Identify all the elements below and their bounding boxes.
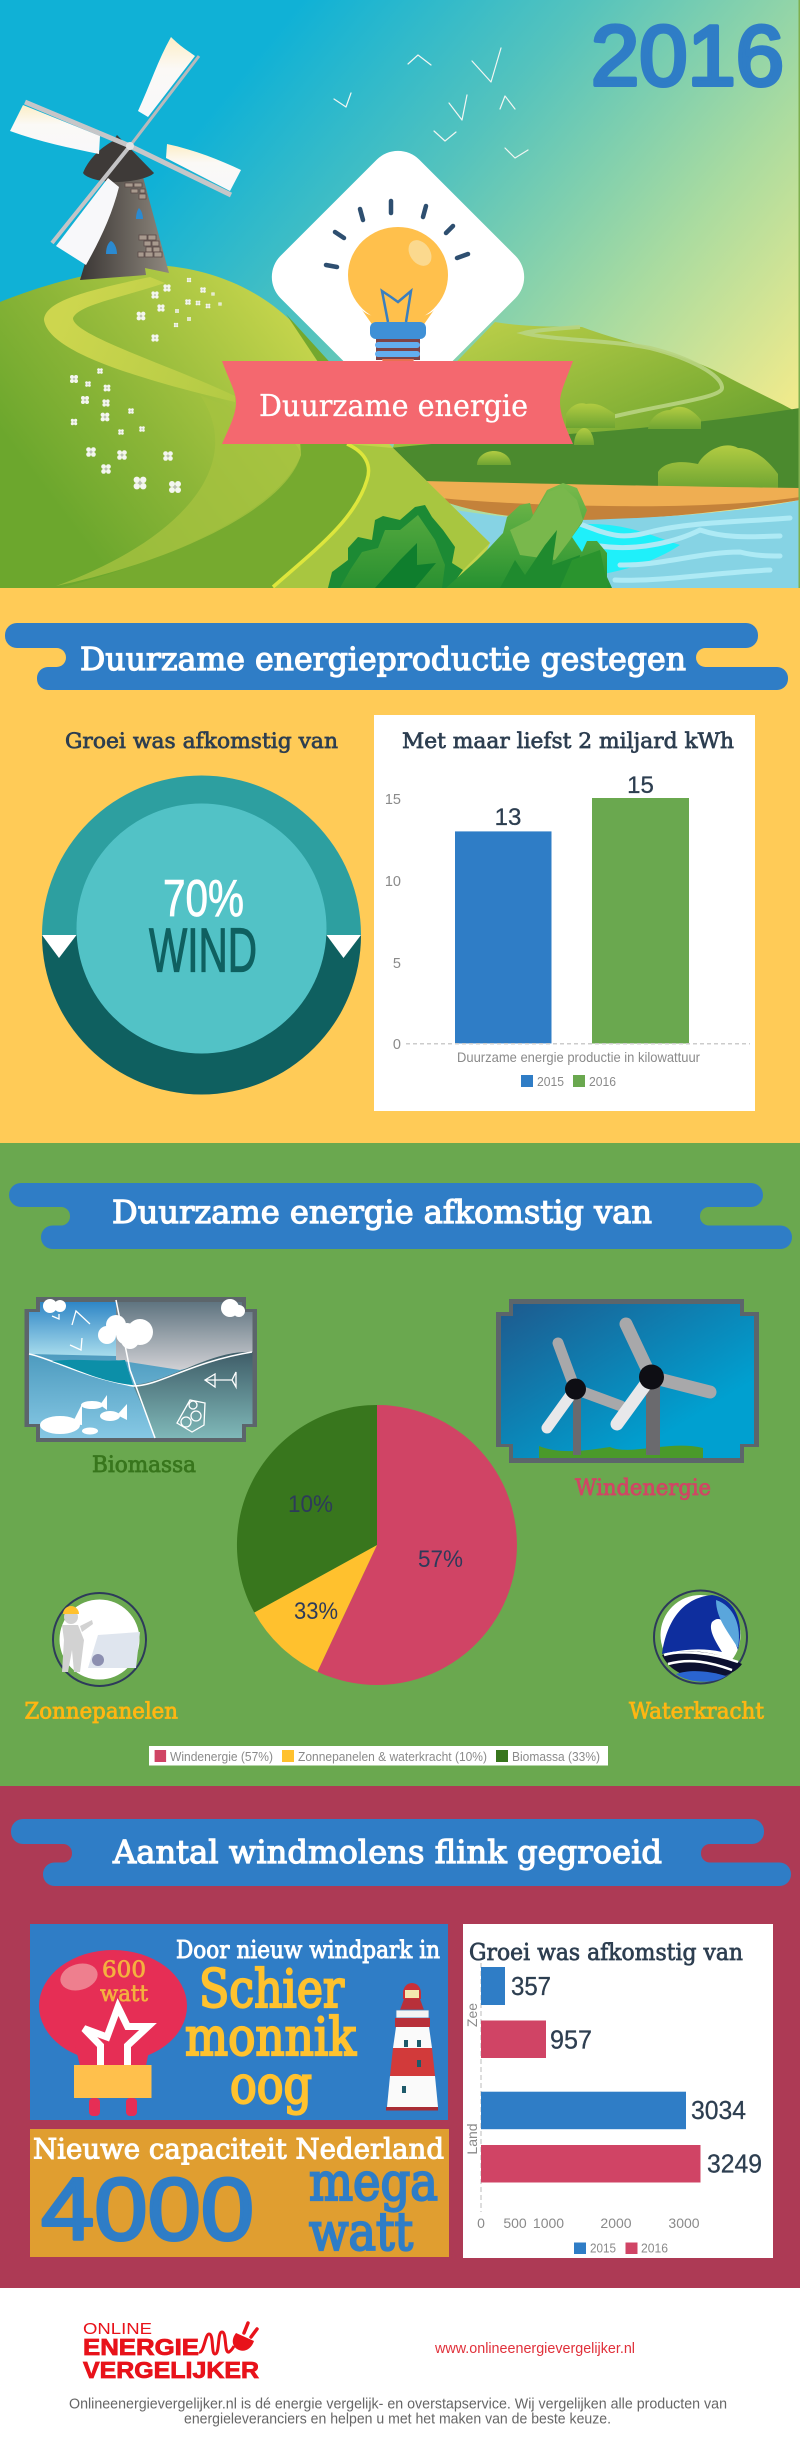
heading banner: Duurzame energie afkomstig van	[112, 1193, 652, 1231]
icon: solar panel worker	[53, 1593, 146, 1686]
intro text: Door nieuw windpark in	[176, 1936, 440, 1964]
section: energy production	[0, 588, 800, 1143]
sand bank	[423, 481, 800, 520]
logo: Online Energie Vergelijker: ENERGIE	[83, 2334, 199, 2360]
lighter swoosh	[56, 395, 301, 586]
place name	[185, 1960, 356, 2116]
icon: lighthouse	[386, 1983, 438, 2110]
pie chart: energy sources: 10%	[288, 1491, 333, 1518]
lower dark slope	[60, 440, 369, 588]
pie chart legend: Zonnepanelen & waterkracht (10%)	[298, 1749, 487, 1764]
horizontal bar chart: land vs sea: Groei was afkomstig van	[469, 1940, 743, 1966]
year 2016: 2016	[591, 9, 784, 104]
section background	[0, 1143, 800, 1786]
footer description: energieleveranciers en helpen u met het maken van de beste keuze.	[184, 2410, 611, 2428]
donut: 70% wind: 70%	[163, 870, 244, 928]
heading banner: Duurzame energieproductie gestegen	[80, 640, 686, 678]
section: hero landscape	[0, 0, 800, 588]
logo: Online Energie Vergelijker	[83, 2321, 259, 2383]
icon: red lightbulb 600 watt: 600	[102, 1958, 146, 1983]
pie chart legend: Biomassa (33%)	[512, 1749, 600, 1764]
lower bright path line	[273, 444, 369, 587]
logo: Online Energie Vergelijker: VERGELIJKER	[83, 2357, 259, 2383]
horizontal bar chart: land vs sea: 3034	[691, 2095, 746, 2125]
icon: red lightbulb 600 watt: watt	[100, 1982, 148, 2007]
horizontal bar chart: land vs sea: 2016	[641, 2240, 668, 2256]
horizontal bar chart: land vs sea	[463, 1924, 773, 2258]
light slope right of path	[273, 444, 490, 588]
icon: red lightbulb 600 watt	[39, 1950, 187, 2116]
website url: www.onlineenergievergelijker.nl	[434, 2340, 635, 2357]
title ribbon: Duurzame energie	[259, 389, 528, 424]
birds	[334, 48, 528, 158]
left hill	[0, 266, 490, 588]
panel: windpark Schiermonnikoog	[30, 1924, 448, 2120]
horizontal bar chart: land vs sea: 3000	[668, 2215, 700, 2231]
right edge strip	[798, 0, 800, 588]
place name: Schier	[199, 1960, 344, 2020]
logo: Online Energie Vergelijker: ONLINE	[83, 2321, 152, 2338]
pie chart: energy sources: 57%	[418, 1546, 463, 1573]
left subtitle: Groei was afkomstig van	[65, 729, 338, 754]
section: wind turbines	[0, 1786, 800, 2288]
title ribbon	[222, 361, 573, 444]
bar chart: production 2015 vs 2016: 5	[393, 956, 401, 972]
heading banner	[0, 623, 800, 690]
heading banner	[0, 1183, 800, 1249]
panel: new capacity: watt	[309, 2203, 413, 2263]
lightbulb badge	[259, 138, 537, 416]
tower	[80, 173, 169, 280]
right bush	[446, 483, 612, 588]
pie chart legend	[149, 1746, 608, 1766]
bulb base	[370, 322, 426, 339]
bar chart: production 2015 vs 2016: 2015	[537, 1074, 564, 1089]
donut: 70% wind	[42, 775, 361, 1094]
windows and bricks	[106, 241, 117, 254]
bar chart: production 2015 vs 2016: 2016	[589, 1074, 616, 1089]
bar chart: production 2015 vs 2016: 15	[385, 792, 401, 808]
poles	[25, 56, 231, 243]
bar chart: production 2015 vs 2016: Met maar liefst 2 miljard kWh	[402, 729, 734, 754]
illustration: wind turbines frame	[496, 1299, 759, 1463]
horizontal bar chart: land vs sea: Land	[464, 2123, 480, 2155]
horizontal bar chart: land vs sea: 500	[503, 2215, 527, 2231]
horizontal bar chart: land vs sea: 957	[550, 2024, 592, 2054]
heading banner	[0, 1819, 800, 1886]
horizontal bar chart: land vs sea: 3249	[707, 2148, 762, 2178]
section background	[0, 588, 800, 1143]
place name: oog	[230, 2056, 312, 2116]
pie chart: energy sources: 33%	[294, 1598, 338, 1625]
panel: new capacity: 4000	[41, 2160, 254, 2258]
bar chart: production 2015 vs 2016	[374, 715, 755, 1111]
pie chart: energy sources	[237, 1405, 517, 1685]
left bush	[328, 505, 463, 588]
section: energy sources	[0, 1143, 800, 1786]
bar chart: production 2015 vs 2016: 0	[393, 1037, 401, 1053]
sails	[138, 37, 195, 117]
horizontal bar chart: land vs sea: Zee	[464, 2003, 480, 2027]
roof	[83, 135, 154, 182]
footer description: Onlineenergievergelijker.nl is dé energie vergelijk- en overstapservice. Wij vergelijken alle producten van	[69, 2396, 727, 2412]
horizontal bar chart: land vs sea: 2000	[600, 2215, 632, 2231]
right hill and landscape	[380, 322, 800, 500]
bar chart: production 2015 vs 2016: 10	[385, 874, 401, 890]
ground	[539, 1446, 703, 1458]
section background	[0, 1786, 800, 2288]
sky background	[0, 0, 800, 588]
label: Biomassa: Biomassa	[92, 1453, 196, 1478]
panel: new capacity: mega	[309, 2153, 438, 2213]
section: footer	[0, 2288, 800, 2458]
place name: monnik	[185, 2008, 356, 2068]
label: Waterkracht: Waterkracht	[629, 1700, 764, 1724]
foreground flowers	[70, 278, 222, 493]
turbine small	[547, 1343, 621, 1455]
panel: new capacity	[30, 2129, 449, 2263]
pie chart legend: Windenergie (57%)	[170, 1749, 273, 1764]
bulb	[348, 227, 448, 323]
bar chart: production 2015 vs 2016: 15	[627, 772, 654, 799]
label: Zonnepanelen: Zonnepanelen	[24, 1700, 178, 1724]
bar chart: production 2015 vs 2016: Duurzame energie productie in kilowattuur	[457, 1049, 700, 1065]
footer background	[0, 2288, 800, 2458]
horizontal bar chart: land vs sea: 357	[511, 1971, 551, 2001]
bar chart: production 2015 vs 2016: 13	[495, 804, 521, 831]
heading banner: Aantal windmolens flink gegroeid	[112, 1833, 662, 1871]
water	[450, 500, 800, 588]
small bushes	[477, 403, 778, 489]
label: Windenergie: Windenergie	[575, 1476, 711, 1501]
panel: new capacity: Nieuwe capaciteit Nederland	[33, 2132, 444, 2166]
icon: water wave	[654, 1590, 747, 1684]
rays	[326, 201, 468, 267]
horizontal bar chart: land vs sea: 1000	[533, 2215, 564, 2231]
illustration: biomass sea frame	[24, 1297, 257, 1442]
horizontal bar chart: land vs sea: 2015	[590, 2240, 616, 2256]
horizontal bar chart: land vs sea: 0	[477, 2215, 485, 2231]
windmill	[10, 37, 241, 280]
donut: 70% wind: WIND	[149, 916, 257, 986]
turbine large	[617, 1324, 710, 1455]
winding road	[44, 277, 235, 402]
foreground bushes	[328, 483, 612, 588]
footer description	[69, 2396, 727, 2428]
